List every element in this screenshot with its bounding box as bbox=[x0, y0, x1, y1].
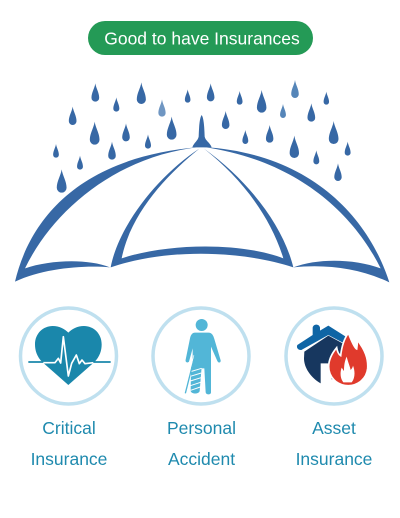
panel: personal accident bbox=[153, 308, 249, 469]
icon: rain drops bbox=[53, 80, 351, 193]
title pill: Good to have Insurances bbox=[104, 28, 300, 48]
icon: house on fire bbox=[286, 308, 382, 404]
icon: injured person bbox=[153, 308, 249, 404]
label: asset insurance: Insurance bbox=[296, 449, 372, 469]
panel: critical insurance bbox=[20, 308, 116, 469]
label: critical insurance: Insurance bbox=[31, 449, 107, 469]
icon: heart with pulse bbox=[20, 308, 116, 404]
label: personal accident: Personal bbox=[167, 418, 236, 438]
icon: umbrella bbox=[15, 115, 389, 282]
label: personal accident: Accident bbox=[168, 449, 235, 469]
panel: asset insurance bbox=[286, 308, 382, 469]
label: critical insurance: Critical bbox=[42, 418, 96, 438]
label: asset insurance: Asset bbox=[312, 418, 356, 438]
title pill bbox=[88, 21, 313, 55]
